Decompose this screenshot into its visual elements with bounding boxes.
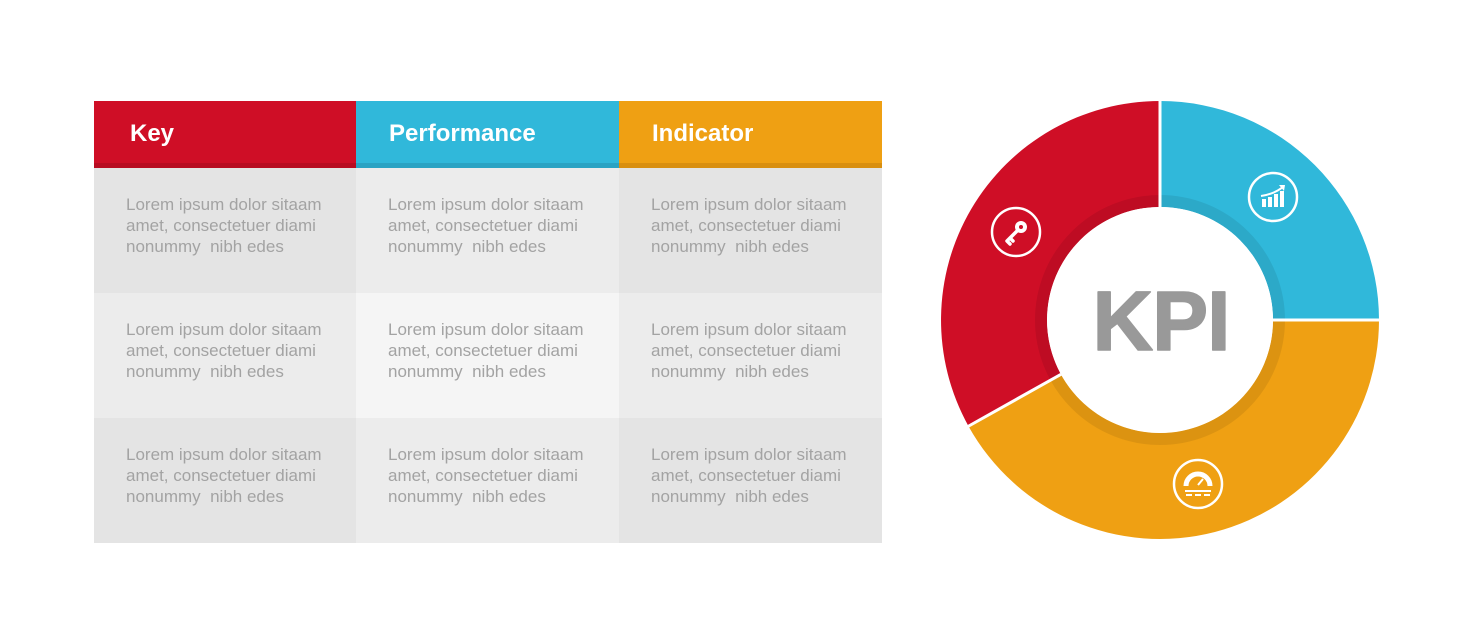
icon: gauge — [1174, 460, 1222, 508]
row 1 col 1 — [94, 168, 357, 293]
row 2 col 1: amet, consectetuer diami — [126, 341, 316, 360]
row 2 col 1: nonummy nibh edes — [126, 362, 284, 381]
row 2 col 3 — [619, 293, 882, 418]
header: Indicator: Indicator — [652, 120, 753, 147]
row 3 col 3 — [619, 418, 882, 543]
row 2 col 2: amet, consectetuer diami — [388, 341, 578, 360]
row 2 col 2: Lorem ipsum dolor sitaam — [388, 320, 584, 339]
row 3 col 2: amet, consectetuer diami — [388, 466, 578, 485]
header: Performance: Performance — [389, 120, 536, 147]
KPI label: KPI — [1092, 274, 1230, 368]
segment: red — [941, 101, 1160, 426]
row 3 col 1 — [94, 418, 357, 543]
row 3 col 2: Lorem ipsum dolor sitaam — [388, 445, 584, 464]
row 1 col 2: nonummy nibh edes — [388, 237, 546, 256]
header: Performance — [356, 101, 619, 168]
header: Indicator — [619, 101, 882, 168]
row 3 col 1: amet, consectetuer diami — [126, 466, 316, 485]
row 2 col 1 — [94, 293, 357, 418]
segment: blue — [1160, 101, 1379, 320]
row 2 col 2: nonummy nibh edes — [388, 362, 546, 381]
row 3 col 2: nonummy nibh edes — [388, 487, 546, 506]
header: Key — [94, 101, 357, 168]
row 3 col 3: nonummy nibh edes — [651, 487, 809, 506]
row 2 col 2 — [356, 293, 619, 418]
row 1 col 1: nonummy nibh edes — [126, 237, 284, 256]
row 2 col 3: nonummy nibh edes — [651, 362, 809, 381]
segment: orange — [968, 320, 1379, 539]
center circle — [1047, 207, 1273, 433]
icon: growth chart — [1249, 173, 1297, 221]
table — [94, 101, 882, 543]
row 2 col 1: Lorem ipsum dolor sitaam — [126, 320, 322, 339]
row 1 col 2: Lorem ipsum dolor sitaam — [388, 195, 584, 214]
row 3 col 3: amet, consectetuer diami — [651, 466, 841, 485]
row 3 col 1: nonummy nibh edes — [126, 487, 284, 506]
row 1 col 3 — [619, 168, 882, 293]
row 1 col 3: Lorem ipsum dolor sitaam — [651, 195, 847, 214]
row 1 col 3: amet, consectetuer diami — [651, 216, 841, 235]
row 3 col 2 — [356, 418, 619, 543]
icon: key — [992, 208, 1040, 256]
row 1 col 2 — [356, 168, 619, 293]
row 3 col 1: Lorem ipsum dolor sitaam — [126, 445, 322, 464]
row 1 col 1: amet, consectetuer diami — [126, 216, 316, 235]
row 2 col 3: amet, consectetuer diami — [651, 341, 841, 360]
row 1 col 2: amet, consectetuer diami — [388, 216, 578, 235]
row 1 col 1: Lorem ipsum dolor sitaam — [126, 195, 322, 214]
inner shade ring — [1041, 201, 1279, 439]
header: Key: Key — [130, 120, 174, 147]
separators — [967, 100, 1380, 427]
row 3 col 3: Lorem ipsum dolor sitaam — [651, 445, 847, 464]
row 1 col 3: nonummy nibh edes — [651, 237, 809, 256]
row 2 col 3: Lorem ipsum dolor sitaam — [651, 320, 847, 339]
